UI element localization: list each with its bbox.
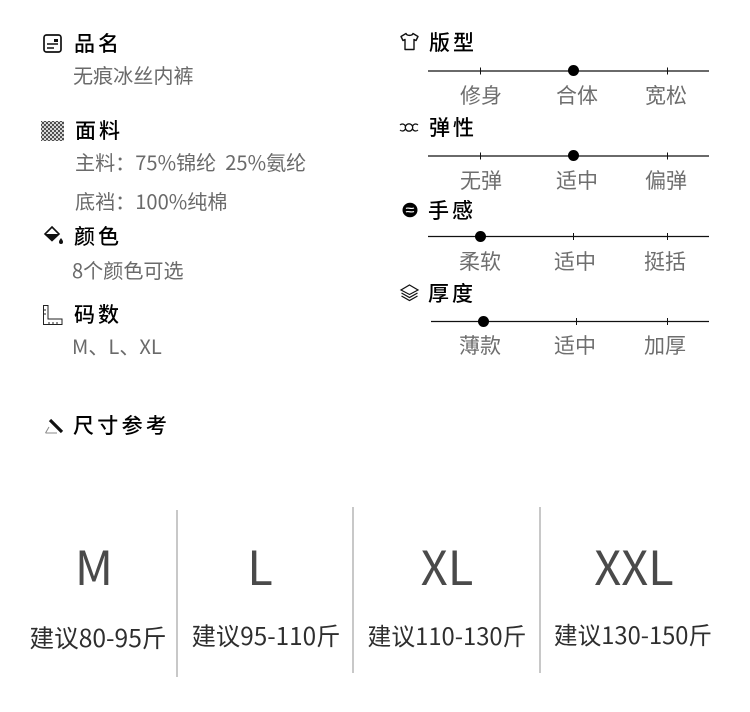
text: main fabric: 主料：75%锦纶 25%氨纶 bbox=[75, 147, 306, 176]
icon: pencil and set square bbox=[45, 418, 64, 434]
label: medium: 适中 bbox=[554, 330, 596, 360]
label: no stretch: 无弹 bbox=[460, 165, 502, 195]
icon: feel bbox=[402, 202, 418, 218]
text: colour value: 8个颜色可选 bbox=[72, 255, 184, 284]
size XXL: XXL bbox=[594, 530, 674, 599]
label: thick: 加厚 bbox=[644, 330, 686, 360]
heading: product name: 品名 bbox=[74, 28, 122, 58]
heading: fabric: 面料 bbox=[75, 115, 123, 145]
heading: colour: 颜色 bbox=[74, 221, 122, 251]
icon: product name card bbox=[43, 34, 62, 53]
text: crotch fabric: 底裆：100%纯棉 bbox=[75, 186, 227, 215]
label: crisp: 挺括 bbox=[644, 246, 686, 276]
icon: paint bucket bbox=[44, 226, 63, 244]
size M: M bbox=[75, 530, 113, 599]
heading: thickness: 厚度 bbox=[428, 278, 476, 308]
label: thin: 薄款 bbox=[459, 330, 501, 360]
size XL: XL bbox=[421, 530, 473, 599]
weight for L: 建议95-110斤 bbox=[192, 617, 340, 652]
label: soft: 柔软 bbox=[459, 246, 501, 276]
heading: size reference: 尺寸参考 bbox=[73, 410, 170, 440]
weight for XXL: 建议130-150斤 bbox=[554, 617, 712, 651]
icon: elasticity bbox=[400, 123, 418, 132]
icon: layers bbox=[400, 284, 420, 302]
label: regular: 合体 bbox=[556, 80, 598, 110]
icon: t-shirt bbox=[400, 32, 419, 50]
heading: elasticity: 弹性 bbox=[429, 112, 477, 142]
icon: ruler bbox=[43, 305, 62, 325]
weight for M: 建议80-95斤 bbox=[30, 619, 166, 655]
label: medium: 适中 bbox=[556, 165, 598, 195]
label: medium: 适中 bbox=[554, 246, 596, 276]
label: loose: 宽松 bbox=[645, 80, 687, 110]
weight for XL: 建议110-130斤 bbox=[368, 617, 526, 652]
label: stretchy: 偏弹 bbox=[645, 165, 687, 195]
heading: hand feel: 手感 bbox=[428, 195, 476, 225]
heading: sizes: 码数 bbox=[74, 299, 122, 329]
size L: L bbox=[247, 530, 273, 599]
text: product name value: 无痕冰丝内裤 bbox=[73, 60, 194, 89]
heading: fit: 版型 bbox=[429, 27, 477, 57]
label: slim: 修身 bbox=[460, 80, 502, 110]
divider bbox=[176, 510, 178, 677]
divider bbox=[352, 507, 354, 673]
icon: fabric texture bbox=[41, 121, 64, 141]
divider bbox=[539, 507, 541, 673]
text: size list: M、L、XL bbox=[72, 331, 162, 360]
